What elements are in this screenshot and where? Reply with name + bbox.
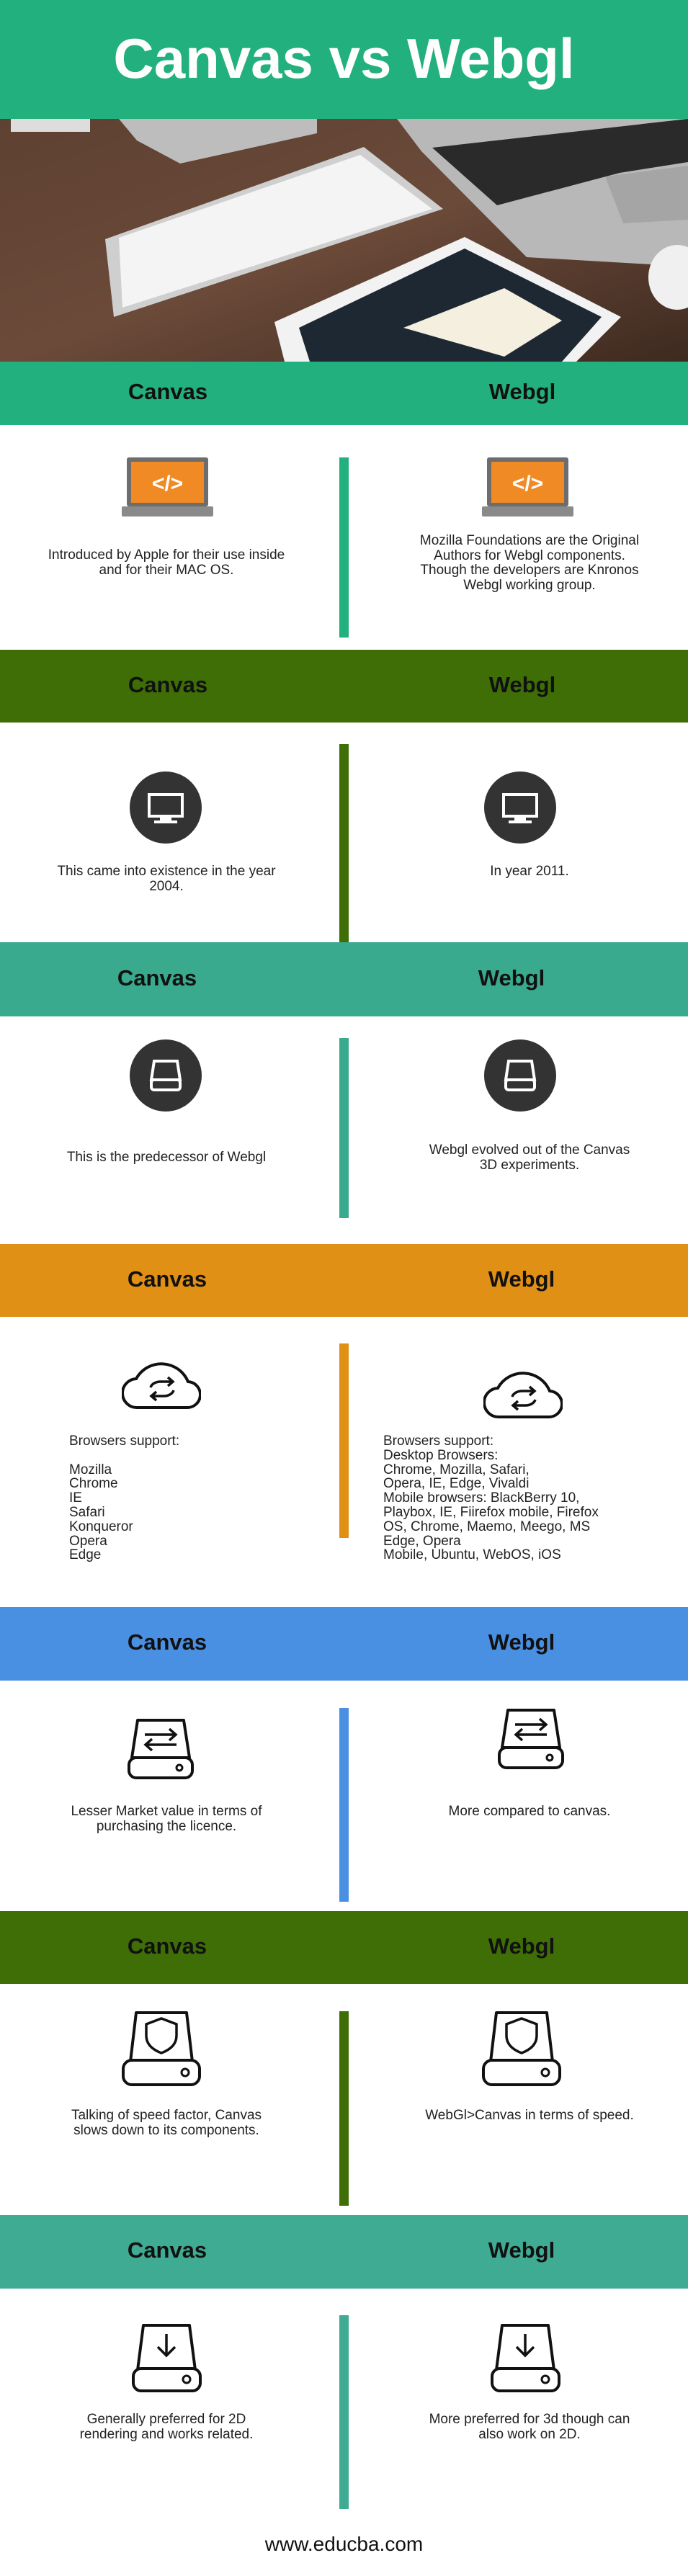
text: webgl browsers: Chrome, Mozilla, Safari, bbox=[383, 1462, 530, 1477]
section 2 header bbox=[0, 650, 688, 723]
section 7 header: Webgl bbox=[488, 2237, 555, 2263]
section 5 header: Canvas bbox=[128, 1629, 207, 1655]
text: webgl speed: WebGl>Canvas in terms of speed. bbox=[425, 2108, 634, 2123]
text: webgl 3D bbox=[429, 2412, 630, 2442]
section 2 header: Canvas bbox=[128, 672, 207, 697]
text: canvas browsers: Mozilla bbox=[69, 1462, 112, 1477]
icon: drive transfer (canvas) bbox=[128, 1719, 194, 1779]
section 3 header: Webgl bbox=[478, 965, 545, 990]
section 1 header: Webgl bbox=[489, 379, 555, 404]
icon: monitor (webgl) bbox=[484, 772, 556, 844]
section 4 header: Webgl bbox=[488, 1266, 555, 1292]
section 7 header: Canvas bbox=[128, 2237, 207, 2263]
text: webgl browsers: Edge, Opera bbox=[383, 1534, 461, 1549]
icon: drive shield (webgl) bbox=[482, 2011, 561, 2086]
text: webgl origin: Mozilla Foundations are the Original bbox=[420, 533, 639, 548]
title: Canvas vs Webgl bbox=[113, 27, 575, 90]
text: canvas 2D bbox=[80, 2412, 253, 2442]
text: canvas browsers: Chrome bbox=[69, 1476, 118, 1491]
hero photo: desk with keyboard, laptop, tablet bbox=[0, 119, 688, 362]
text: webgl browsers: Opera, IE, Edge, Vivaldi bbox=[383, 1476, 529, 1491]
icon: drive shield (canvas) bbox=[122, 2011, 201, 2086]
text: canvas speed bbox=[71, 2108, 262, 2138]
icon: cloud sync (webgl) bbox=[483, 1372, 563, 1418]
section 4 header bbox=[0, 1244, 688, 1317]
section 4 header: Canvas bbox=[128, 1266, 207, 1292]
text: webgl market value: More compared to canvas. bbox=[449, 1804, 610, 1819]
footer url: www.educba.com bbox=[265, 2533, 423, 2555]
section 2 header: Webgl bbox=[489, 672, 555, 697]
icon: drive transfer (webgl) bbox=[498, 1709, 564, 1769]
text: webgl evolved: 3D experiments. bbox=[480, 1157, 579, 1173]
section 6 header: Canvas bbox=[128, 1933, 207, 1959]
icon: drive download (webgl) bbox=[491, 2324, 560, 2392]
icon: drive download (canvas) bbox=[132, 2324, 202, 2392]
text: webgl browsers: Playbox, IE, Fiirefox mobile, Firefox bbox=[383, 1505, 599, 1520]
text: canvas origin: and for their MAC OS. bbox=[99, 562, 233, 578]
icon: drive circle (canvas) bbox=[130, 1039, 202, 1112]
text: canvas year bbox=[57, 864, 276, 893]
text: canvas browsers: Browsers support: bbox=[69, 1434, 179, 1449]
text: webgl browsers bbox=[383, 1434, 599, 1562]
text: webgl browsers: Desktop Browsers: bbox=[383, 1448, 498, 1463]
icon: laptop code (canvas) bbox=[122, 457, 213, 516]
icon: laptop code (webgl): </> bbox=[512, 472, 543, 496]
section 6 header bbox=[0, 1911, 688, 1984]
section 5 header bbox=[0, 1607, 688, 1681]
section 1 header: Canvas bbox=[128, 379, 207, 404]
text: canvas browsers: Edge bbox=[69, 1547, 101, 1562]
text: webgl browsers: Mobile browsers: BlackBerry 10, bbox=[383, 1490, 579, 1506]
text: webgl 3D: More preferred for 3d though can bbox=[429, 2412, 630, 2427]
text: webgl origin: Authors for Webgl components. bbox=[434, 547, 625, 563]
text: canvas origin: Introduced by Apple for their use inside bbox=[48, 547, 285, 563]
section 1 header bbox=[0, 362, 688, 425]
text: canvas market value: purchasing the licence. bbox=[97, 1818, 236, 1834]
text: canvas 2D: Generally preferred for 2D bbox=[87, 2412, 246, 2427]
title banner bbox=[0, 0, 688, 119]
section 7 header bbox=[0, 2215, 688, 2289]
text: webgl origin: Though the developers are Knronos bbox=[420, 563, 639, 578]
section 3 header bbox=[0, 942, 688, 1016]
text: webgl evolved: Webgl evolved out of the Canvas bbox=[429, 1142, 630, 1158]
text: canvas origin bbox=[48, 547, 285, 578]
text: canvas browsers: Opera bbox=[69, 1534, 107, 1549]
text: webgl origin bbox=[420, 533, 639, 592]
text: canvas browsers bbox=[69, 1434, 179, 1562]
text: canvas browsers: Konqueror bbox=[69, 1519, 133, 1534]
section 3 header: Canvas bbox=[117, 965, 197, 990]
text: webgl browsers: Mobile, Ubuntu, WebOS, iOS bbox=[383, 1547, 561, 1562]
text: canvas speed: slows down to its components. bbox=[73, 2122, 259, 2138]
text: canvas market value: Lesser Market value in terms of bbox=[71, 1804, 262, 1819]
text: canvas browsers: IE bbox=[69, 1490, 82, 1506]
section 6 header: Webgl bbox=[488, 1933, 555, 1959]
text: webgl origin: Webgl working group. bbox=[463, 578, 596, 592]
icon: monitor (canvas) bbox=[130, 772, 202, 844]
text: canvas year: 2004. bbox=[149, 879, 184, 893]
text: canvas predecessor: This is the predecessor of Webgl bbox=[67, 1150, 266, 1165]
text: canvas year: This came into existence in the year bbox=[57, 864, 276, 879]
icon: drive circle (webgl) bbox=[484, 1039, 556, 1112]
icon: cloud sync (canvas) bbox=[122, 1362, 201, 1409]
text: webgl year: In year 2011. bbox=[490, 864, 569, 879]
text: canvas browsers: Safari bbox=[69, 1505, 105, 1520]
icon: laptop code (webgl) bbox=[482, 457, 573, 516]
text: webgl browsers: OS, Chrome, Maemo, Meego, MS bbox=[383, 1519, 590, 1534]
text: webgl 3D: also work on 2D. bbox=[478, 2426, 581, 2442]
text: canvas market value bbox=[71, 1804, 262, 1834]
section 5 header: Webgl bbox=[488, 1629, 555, 1655]
text: webgl evolved bbox=[429, 1142, 630, 1173]
text: canvas 2D: rendering and works related. bbox=[80, 2426, 253, 2442]
icon: laptop code (canvas): </> bbox=[152, 472, 183, 496]
text: canvas speed: Talking of speed factor, Canvas bbox=[71, 2108, 262, 2123]
text: webgl browsers: Browsers support: bbox=[383, 1434, 493, 1449]
